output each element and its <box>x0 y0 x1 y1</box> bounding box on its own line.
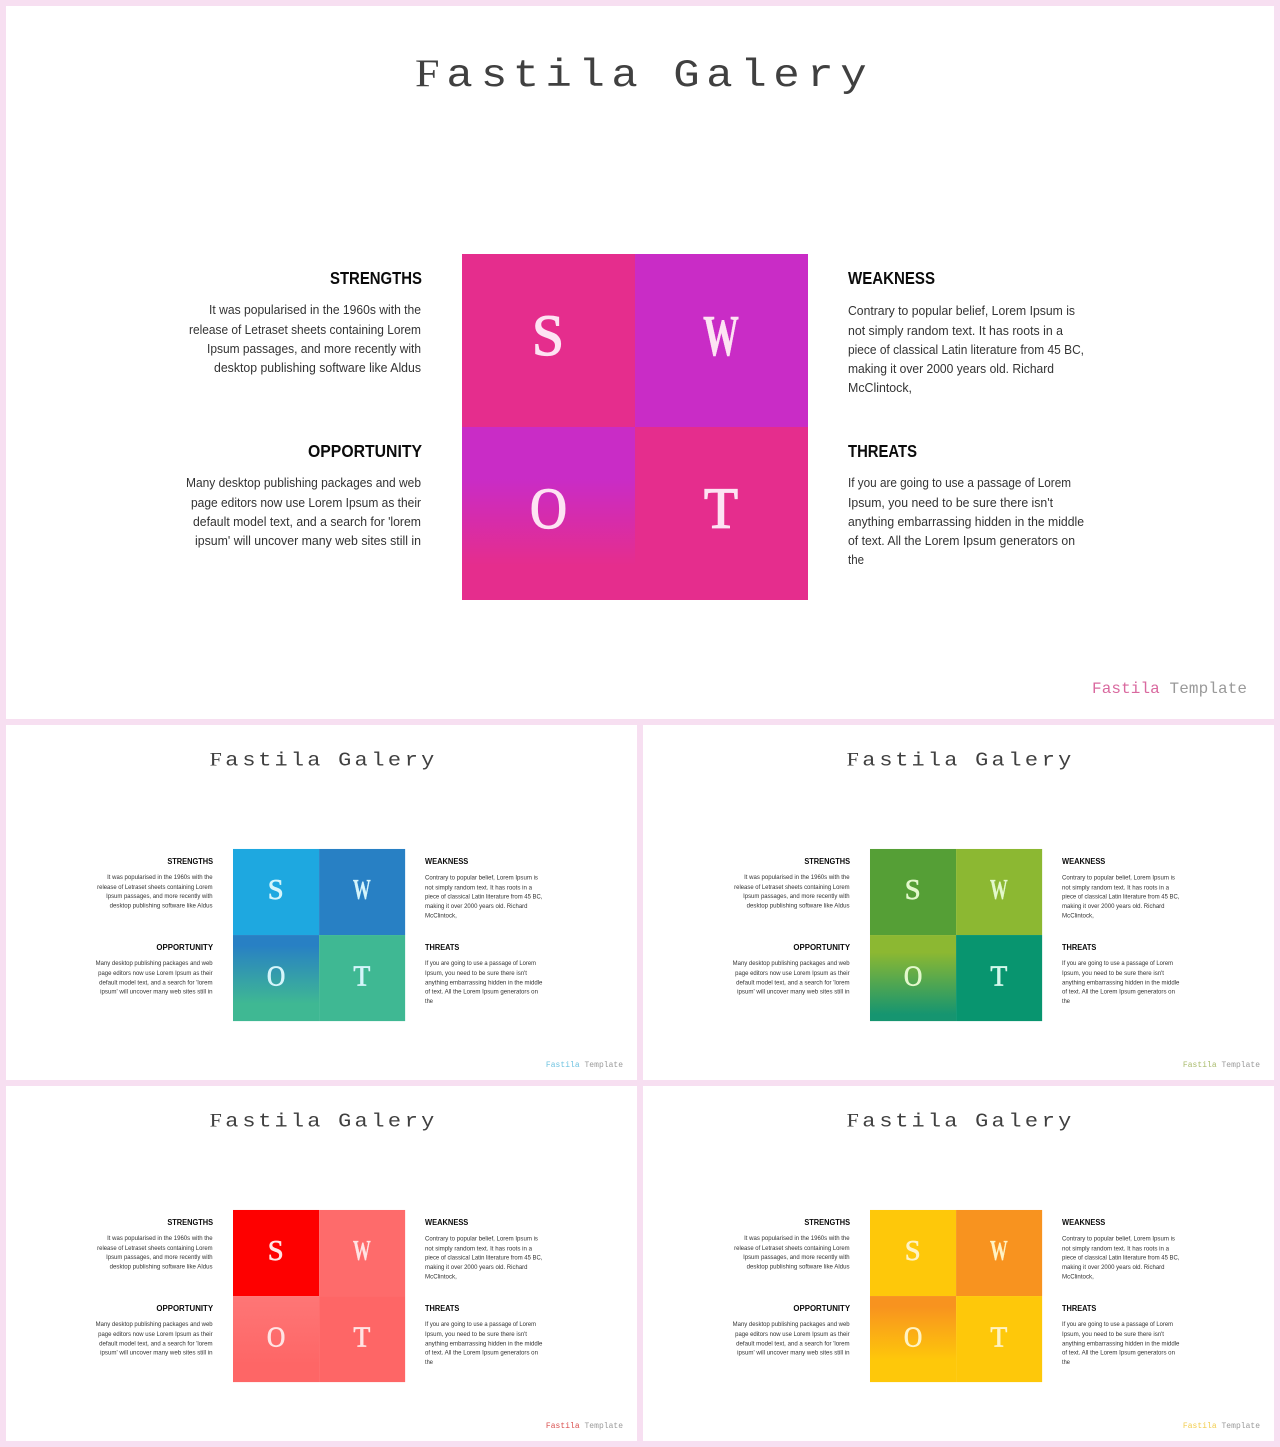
threats text: THREATS <box>425 942 460 952</box>
weakness text: Contrary to popular belief, Lorem Ipsum is <box>425 1235 538 1242</box>
threats text: Ipsum, you need to be sure there isn't <box>848 495 1053 510</box>
SWOT matrix <box>233 849 405 1021</box>
SWOT matrix: T <box>353 960 371 992</box>
strengths text: desktop publishing software like Aldus <box>747 1264 850 1271</box>
panel: pink SWOT slide <box>6 6 1274 719</box>
panel: blue SWOT slide <box>6 725 637 1080</box>
opportunity text: page editors now use Lorem Ipsum as their <box>735 1331 850 1338</box>
threats text: If you are going to use a passage of Lorem <box>425 960 536 967</box>
footer brand: Fastila Template <box>546 1061 623 1070</box>
threats text: THREATS <box>425 1303 460 1313</box>
SWOT matrix: S <box>905 1235 921 1267</box>
threats text: anything embarrassing hidden in the middle <box>425 979 543 986</box>
strengths text: Ipsum passages, and more recently with <box>743 1254 850 1261</box>
strengths text: desktop publishing software like Aldus <box>747 903 850 910</box>
opportunity text: OPPORTUNITY <box>308 441 422 461</box>
weakness text <box>1062 856 1180 920</box>
opportunity text: default model text, and a search for 'lorem <box>99 979 213 986</box>
opportunity text: page editors now use Lorem Ipsum as their <box>191 495 422 510</box>
weakness text: making it over 2000 years old. Richard <box>425 1264 528 1271</box>
threats text <box>1062 1303 1180 1366</box>
weakness text: Contrary to popular belief, Lorem Ipsum is <box>848 303 1075 318</box>
opportunity text: ipsum' will uncover many web sites still in <box>737 989 850 996</box>
opportunity text: Many desktop publishing packages and web <box>96 960 213 967</box>
weakness text: piece of classical Latin literature from 45 BC, <box>425 894 543 901</box>
threats text: If you are going to use a passage of Lorem <box>1062 960 1173 967</box>
opportunity text: page editors now use Lorem Ipsum as their <box>98 1331 213 1338</box>
weakness text: McClintock, <box>425 913 457 920</box>
opportunity text: Many desktop publishing packages and web <box>733 960 850 967</box>
weakness text: WEAKNESS <box>848 268 935 288</box>
opportunity text: page editors now use Lorem Ipsum as their <box>98 970 213 977</box>
weakness text: McClintock, <box>848 380 912 395</box>
opportunity text: default model text, and a search for 'lorem <box>736 979 850 986</box>
opportunity text: Many desktop publishing packages and web <box>186 475 421 490</box>
threats text: Ipsum, you need to be sure there isn't <box>1062 1331 1164 1338</box>
strengths text <box>734 856 850 910</box>
panel: red SWOT slide <box>6 1086 637 1441</box>
threats text: of text. All the Lorem Ipsum generators on <box>1062 1350 1175 1357</box>
threats text: anything embarrassing hidden in the middle <box>425 1340 543 1347</box>
SWOT matrix: S <box>268 1235 284 1267</box>
weakness text <box>1062 1217 1180 1281</box>
strengths text: It was popularised in the 1960s with the <box>744 874 850 881</box>
footer brand: Fastila Template <box>1183 1061 1260 1070</box>
opportunity text: ipsum' will uncover many web sites still in <box>100 1350 213 1357</box>
SWOT matrix: W <box>703 303 739 368</box>
weakness text: not simply random text. It has roots in a <box>848 323 1064 338</box>
SWOT matrix: W <box>990 874 1008 906</box>
threats text: Ipsum, you need to be sure there isn't <box>425 1331 527 1338</box>
opportunity text: ipsum' will uncover many web sites still in <box>195 533 421 548</box>
opportunity text <box>186 441 422 548</box>
threats text: THREATS <box>848 441 917 461</box>
strengths text: release of Letraset sheets containing Lorem <box>734 1245 850 1252</box>
opportunity text: OPPORTUNITY <box>156 1303 213 1313</box>
weakness text: making it over 2000 years old. Richard <box>1062 1264 1165 1271</box>
threats text: the <box>425 998 433 1005</box>
weakness text: piece of classical Latin literature from 45 BC, <box>848 342 1084 357</box>
opportunity text: Many desktop publishing packages and web <box>96 1321 213 1328</box>
weakness text: WEAKNESS <box>1062 856 1105 866</box>
strengths text: release of Letraset sheets containing Lorem <box>189 322 421 337</box>
strengths text: desktop publishing software like Aldus <box>214 360 421 375</box>
opportunity text: default model text, and a search for 'lorem <box>193 514 421 529</box>
threats text: the <box>848 552 864 567</box>
weakness text: McClintock, <box>1062 913 1094 920</box>
title: Fastila Galery <box>415 52 867 98</box>
opportunity text: ipsum' will uncover many web sites still in <box>100 989 213 996</box>
weakness text: Contrary to popular belief, Lorem Ipsum is <box>425 874 538 881</box>
strengths text <box>734 1217 850 1271</box>
strengths text <box>189 268 422 375</box>
threats text: Ipsum, you need to be sure there isn't <box>1062 970 1164 977</box>
footer brand: Fastila Template <box>546 1422 623 1431</box>
SWOT matrix: O <box>904 960 922 992</box>
SWOT matrix: S <box>268 874 284 906</box>
threats text <box>1062 942 1180 1005</box>
SWOT matrix: T <box>704 476 738 541</box>
weakness text: not simply random text. It has roots in a <box>1062 884 1169 891</box>
threats text: of text. All the Lorem Ipsum generators on <box>425 989 538 996</box>
weakness text <box>848 268 1084 395</box>
strengths text: desktop publishing software like Aldus <box>110 1264 213 1271</box>
panel: yellow SWOT slide <box>643 1086 1274 1441</box>
SWOT matrix <box>233 1210 405 1382</box>
opportunity text <box>733 1303 850 1357</box>
threats text: anything embarrassing hidden in the middle <box>848 514 1084 529</box>
strengths text: It was popularised in the 1960s with the <box>744 1235 850 1242</box>
strengths text: STRENGTHS <box>167 856 213 866</box>
weakness text: piece of classical Latin literature from 45 BC, <box>425 1255 543 1262</box>
weakness text: piece of classical Latin literature from 45 BC, <box>1062 894 1180 901</box>
weakness text: WEAKNESS <box>425 856 468 866</box>
weakness text: making it over 2000 years old. Richard <box>425 903 528 910</box>
opportunity text: OPPORTUNITY <box>156 942 213 952</box>
SWOT matrix: O <box>267 1321 285 1353</box>
strengths text: STRENGTHS <box>330 268 422 288</box>
weakness text: not simply random text. It has roots in a <box>1062 1245 1169 1252</box>
title: Fastila Galery <box>847 1110 1071 1133</box>
strengths text: STRENGTHS <box>804 1217 850 1227</box>
threats text: the <box>1062 998 1070 1005</box>
footer brand: Fastila Template <box>1183 1422 1260 1431</box>
weakness text <box>425 856 543 920</box>
strengths text: It was popularised in the 1960s with the <box>107 874 213 881</box>
threats text: If you are going to use a passage of Lorem <box>848 475 1071 490</box>
SWOT matrix: W <box>353 1235 371 1267</box>
threats text: THREATS <box>1062 942 1097 952</box>
SWOT matrix: T <box>990 960 1008 992</box>
opportunity text <box>96 1303 213 1357</box>
weakness text: piece of classical Latin literature from 45 BC, <box>1062 1255 1180 1262</box>
weakness text: not simply random text. It has roots in a <box>425 884 532 891</box>
title: Fastila Galery <box>210 749 434 772</box>
SWOT matrix: S <box>532 303 564 368</box>
weakness text: McClintock, <box>425 1274 457 1281</box>
weakness text: making it over 2000 years old. Richard <box>1062 903 1165 910</box>
weakness text: WEAKNESS <box>425 1217 468 1227</box>
weakness text: WEAKNESS <box>1062 1217 1105 1227</box>
strengths text: release of Letraset sheets containing Lorem <box>734 884 850 891</box>
strengths text: desktop publishing software like Aldus <box>110 903 213 910</box>
strengths text <box>97 856 213 910</box>
weakness text: not simply random text. It has roots in a <box>425 1245 532 1252</box>
SWOT matrix: T <box>990 1321 1008 1353</box>
threats text <box>425 1303 543 1366</box>
weakness text <box>425 1217 543 1281</box>
opportunity text: default model text, and a search for 'lorem <box>99 1340 213 1347</box>
SWOT matrix: W <box>353 874 371 906</box>
strengths text: Ipsum passages, and more recently with <box>106 1254 213 1261</box>
SWOT matrix: O <box>904 1321 922 1353</box>
threats text: Ipsum, you need to be sure there isn't <box>425 970 527 977</box>
threats text <box>848 441 1084 567</box>
threats text: anything embarrassing hidden in the middle <box>1062 979 1180 986</box>
opportunity text <box>733 942 850 996</box>
footer brand: Fastila Template <box>1092 680 1247 698</box>
SWOT matrix <box>870 1210 1042 1382</box>
strengths text: STRENGTHS <box>804 856 850 866</box>
SWOT matrix: W <box>990 1235 1008 1267</box>
panel: green SWOT slide <box>643 725 1274 1080</box>
strengths text <box>97 1217 213 1271</box>
SWOT matrix: O <box>267 960 285 992</box>
threats text: the <box>425 1359 433 1366</box>
strengths text: STRENGTHS <box>167 1217 213 1227</box>
opportunity text: OPPORTUNITY <box>793 1303 850 1313</box>
weakness text: Contrary to popular belief, Lorem Ipsum is <box>1062 1235 1175 1242</box>
strengths text: Ipsum passages, and more recently with <box>207 341 421 356</box>
threats text: of text. All the Lorem Ipsum generators on <box>1062 989 1175 996</box>
SWOT matrix <box>870 849 1042 1021</box>
threats text <box>425 942 543 1005</box>
strengths text: It was popularised in the 1960s with the <box>209 302 421 317</box>
opportunity text: Many desktop publishing packages and web <box>733 1321 850 1328</box>
threats text: If you are going to use a passage of Lorem <box>1062 1321 1173 1328</box>
title: Fastila Galery <box>847 749 1071 772</box>
strengths text: Ipsum passages, and more recently with <box>743 893 850 900</box>
strengths text: Ipsum passages, and more recently with <box>106 893 213 900</box>
SWOT matrix <box>462 254 808 600</box>
SWOT matrix: S <box>905 874 921 906</box>
SWOT matrix: T <box>353 1321 371 1353</box>
opportunity text: ipsum' will uncover many web sites still in <box>737 1350 850 1357</box>
opportunity text: default model text, and a search for 'lorem <box>736 1340 850 1347</box>
SWOT matrix: O <box>530 476 567 541</box>
threats text: THREATS <box>1062 1303 1097 1313</box>
weakness text: Contrary to popular belief, Lorem Ipsum is <box>1062 874 1175 881</box>
threats text: the <box>1062 1359 1070 1366</box>
title: Fastila Galery <box>210 1110 434 1133</box>
strengths text: It was popularised in the 1960s with the <box>107 1235 213 1242</box>
weakness text: McClintock, <box>1062 1274 1094 1281</box>
threats text: of text. All the Lorem Ipsum generators on <box>848 533 1075 548</box>
weakness text: making it over 2000 years old. Richard <box>848 361 1054 376</box>
threats text: If you are going to use a passage of Lorem <box>425 1321 536 1328</box>
threats text: of text. All the Lorem Ipsum generators on <box>425 1350 538 1357</box>
strengths text: release of Letraset sheets containing Lorem <box>97 1245 213 1252</box>
opportunity text: page editors now use Lorem Ipsum as their <box>735 970 850 977</box>
threats text: anything embarrassing hidden in the middle <box>1062 1340 1180 1347</box>
opportunity text: OPPORTUNITY <box>793 942 850 952</box>
strengths text: release of Letraset sheets containing Lorem <box>97 884 213 891</box>
opportunity text <box>96 942 213 996</box>
